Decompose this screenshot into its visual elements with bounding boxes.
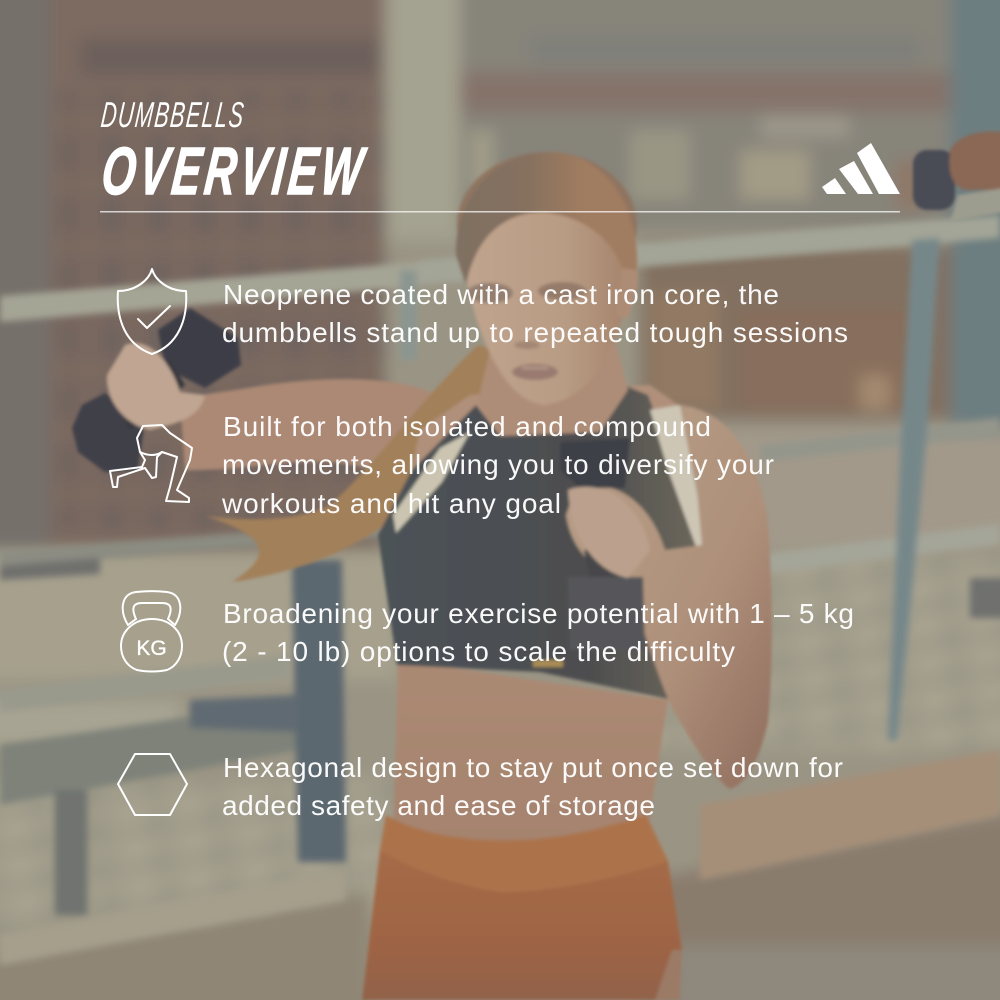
sports top — [378, 386, 703, 699]
shorts — [362, 815, 682, 1000]
text: weight options: Broadening your exercise potential with 1 – 5 kg — [223, 598, 854, 629]
text: neoprene — [222, 279, 848, 348]
ear — [616, 263, 638, 318]
hair braid — [205, 345, 498, 582]
text: movements: movements, allowing you to diversify your — [222, 449, 774, 480]
eye sockets, nose and mouth — [467, 282, 586, 380]
text: hexagonal design: added safety and ease of storage — [222, 790, 655, 821]
left hand — [107, 343, 205, 430]
face — [462, 212, 632, 405]
far arm — [180, 379, 470, 480]
text: neoprene: dumbbells stand up to repeated tough sessions — [222, 317, 848, 348]
railings — [0, 262, 420, 322]
far dumbbell and hand — [913, 150, 955, 210]
text: weight options: (2 - 10 lb) options to scale the difficulty — [222, 636, 735, 667]
hair back — [457, 152, 637, 298]
right arm — [566, 405, 772, 789]
text: movements: Built for both isolated and compound — [223, 411, 711, 442]
title: OVERVIEW: OVERVIEW — [99, 134, 370, 208]
posts — [292, 560, 346, 862]
text: neoprene: Neoprene coated with a cast iron core, the — [223, 279, 779, 310]
hair top — [456, 152, 637, 285]
text: movements: workouts and hit any goal — [221, 488, 561, 519]
text: movements — [221, 411, 774, 519]
icon: shield with check — [118, 269, 186, 354]
icon: kettlebell: KG — [136, 637, 167, 660]
centre dumbbell — [560, 438, 630, 488]
text: hexagonal design: Hexagonal design to stay put once set down for — [223, 752, 843, 783]
text: hexagonal design — [222, 752, 843, 821]
header divider — [100, 211, 900, 212]
icon: lunge figure — [110, 425, 192, 502]
neck — [478, 340, 628, 436]
left dumbbell — [158, 308, 241, 388]
text: weight options — [222, 598, 854, 667]
icon: adidas logo — [822, 143, 900, 194]
torso skin — [393, 660, 668, 850]
title: DUMBBELLS: DUMBBELLS — [99, 96, 246, 135]
icon: hexagon — [118, 754, 187, 815]
icon: kettlebell — [121, 591, 182, 672]
